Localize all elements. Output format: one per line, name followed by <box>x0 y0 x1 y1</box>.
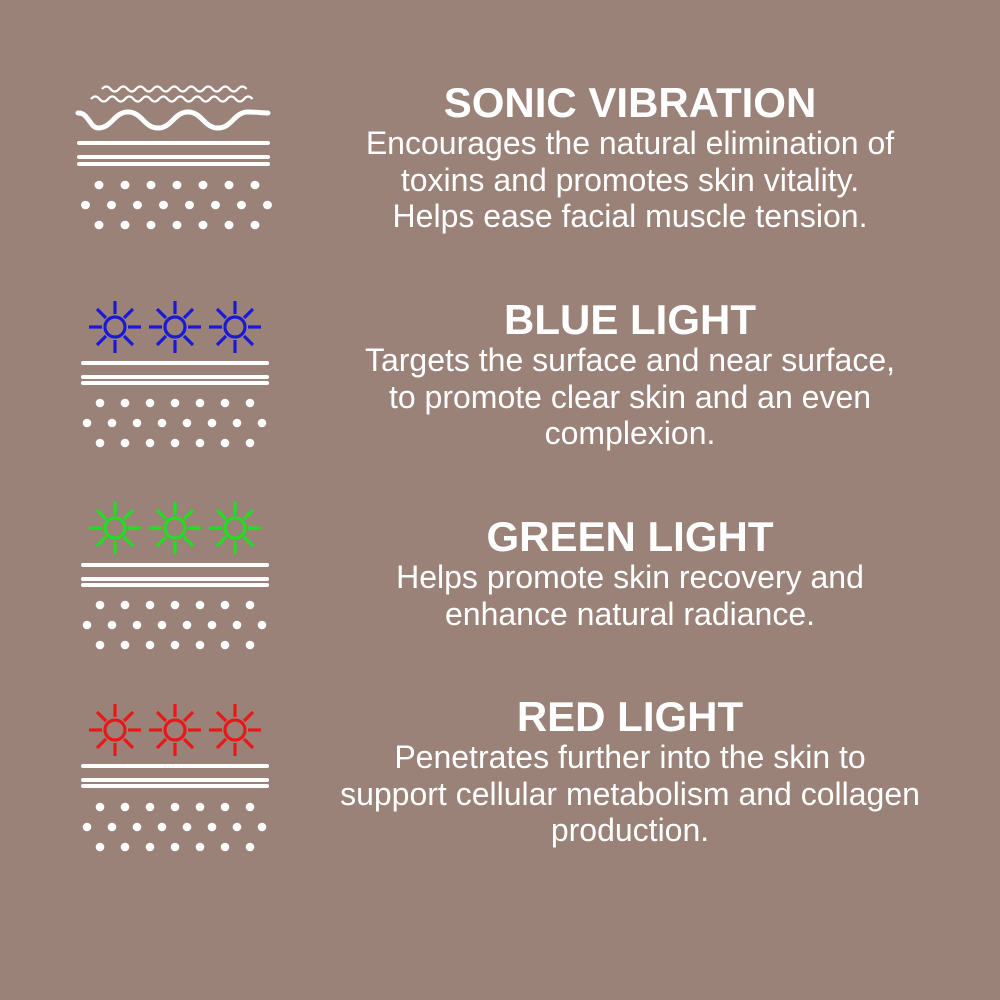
heading: blue light: BLUE LIGHT <box>504 296 756 343</box>
text: sonic vibration <box>366 79 894 234</box>
body: red light: production. <box>551 812 709 848</box>
icon: green light <box>83 502 267 649</box>
body: blue light <box>365 342 895 451</box>
heading: green light: GREEN LIGHT <box>486 513 774 560</box>
text: red light <box>340 693 920 848</box>
body: red light <box>340 739 920 848</box>
icon: red light <box>83 704 267 851</box>
body: blue light: to promote clear skin and an even <box>389 378 871 414</box>
heading: red light: RED LIGHT <box>517 693 743 740</box>
body: sonic vibration: toxins and promotes skin vitality. <box>401 162 859 198</box>
body: red light: Penetrates further into the skin to <box>394 739 866 775</box>
body: red light: support cellular metabolism and collagen <box>340 776 920 812</box>
text: green light <box>396 513 864 632</box>
body: blue light: Targets the surface and near surface, <box>365 342 895 378</box>
icon: blue light <box>83 301 267 447</box>
icon: sonic vibration <box>78 86 272 229</box>
heading: sonic vibration: SONIC VIBRATION <box>444 79 816 126</box>
body: sonic vibration: Encourages the natural elimination of <box>366 125 894 161</box>
body: sonic vibration <box>366 125 894 234</box>
body: green light: enhance natural radiance. <box>445 596 815 632</box>
body: green light <box>396 559 864 632</box>
body: blue light: complexion. <box>545 415 715 451</box>
body: sonic vibration: Helps ease facial muscle tension. <box>393 198 867 234</box>
body: green light: Helps promote skin recovery and <box>396 559 864 595</box>
text: blue light <box>365 296 895 451</box>
